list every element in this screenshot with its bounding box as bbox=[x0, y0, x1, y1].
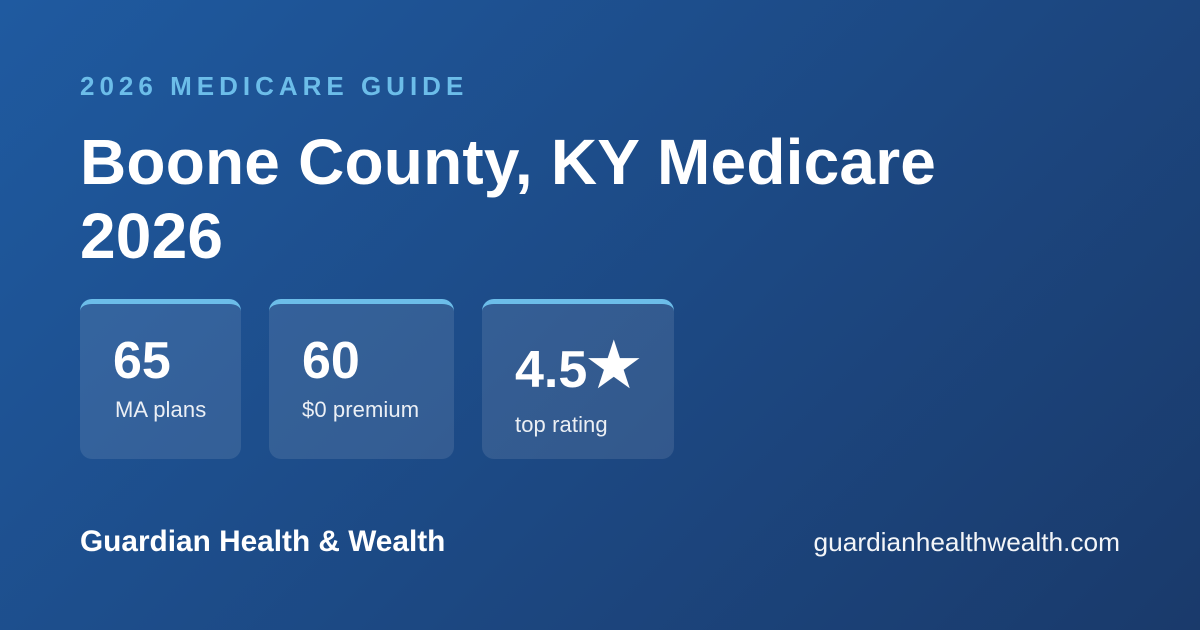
stat card: MA plans bbox=[80, 299, 241, 459]
stat label: MA plans: MA plans bbox=[115, 397, 206, 422]
stat value: 4.5 star: 4.5★ bbox=[515, 326, 644, 404]
stat label: $0 premium: $0 premium bbox=[302, 397, 419, 422]
title: 2026 bbox=[80, 200, 223, 272]
brand name: Guardian Health & Wealth bbox=[80, 525, 445, 558]
stat value: 65: 65 bbox=[113, 332, 171, 390]
eyebrow label: 2026 MEDICARE GUIDE bbox=[80, 71, 468, 101]
website: guardianhealthwealth.com bbox=[814, 527, 1120, 557]
title bbox=[80, 126, 936, 272]
stat value: 60: 60 bbox=[302, 332, 360, 390]
title: Boone County, KY Medicare bbox=[80, 126, 936, 198]
stat card: top rating bbox=[482, 299, 674, 459]
stat label: top rating: top rating bbox=[515, 412, 608, 437]
stat card: $0 premium bbox=[269, 299, 454, 459]
